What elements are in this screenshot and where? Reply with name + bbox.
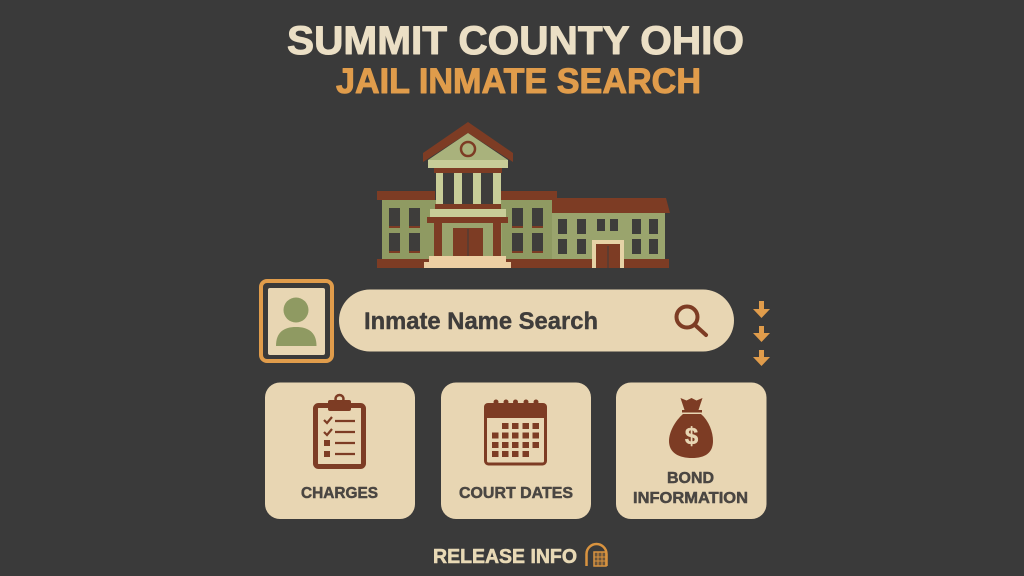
search bar: Inmate Name Search	[364, 308, 598, 335]
title	[287, 19, 744, 101]
illustration: courthouse building	[377, 122, 670, 268]
icon: person	[276, 298, 316, 346]
arrows: down	[753, 301, 770, 366]
release info: RELEASE INFO	[433, 546, 577, 568]
small door	[592, 240, 624, 268]
icon: jail door	[586, 544, 606, 566]
panel: court dates: COURT DATES	[459, 485, 573, 502]
title: JAIL INMATE SEARCH	[336, 62, 701, 101]
panel: bond information	[616, 382, 766, 519]
icon: calendar	[484, 400, 547, 464]
panel: charges	[265, 382, 415, 519]
panel: charges: CHARGES	[301, 485, 378, 502]
icon: money bag: $	[685, 423, 699, 450]
title: SUMMIT COUNTY OHIO	[287, 19, 744, 63]
panel: court dates	[441, 382, 591, 519]
icon: money bag	[669, 398, 713, 458]
icon: magnifying glass	[676, 306, 706, 335]
panel: bond information: BOND	[667, 470, 714, 487]
icon: clipboard	[316, 395, 364, 466]
panel: bond information: INFORMATION	[633, 490, 748, 507]
portico	[423, 122, 513, 268]
inmate photo frame	[261, 281, 332, 361]
search bar	[339, 290, 734, 352]
